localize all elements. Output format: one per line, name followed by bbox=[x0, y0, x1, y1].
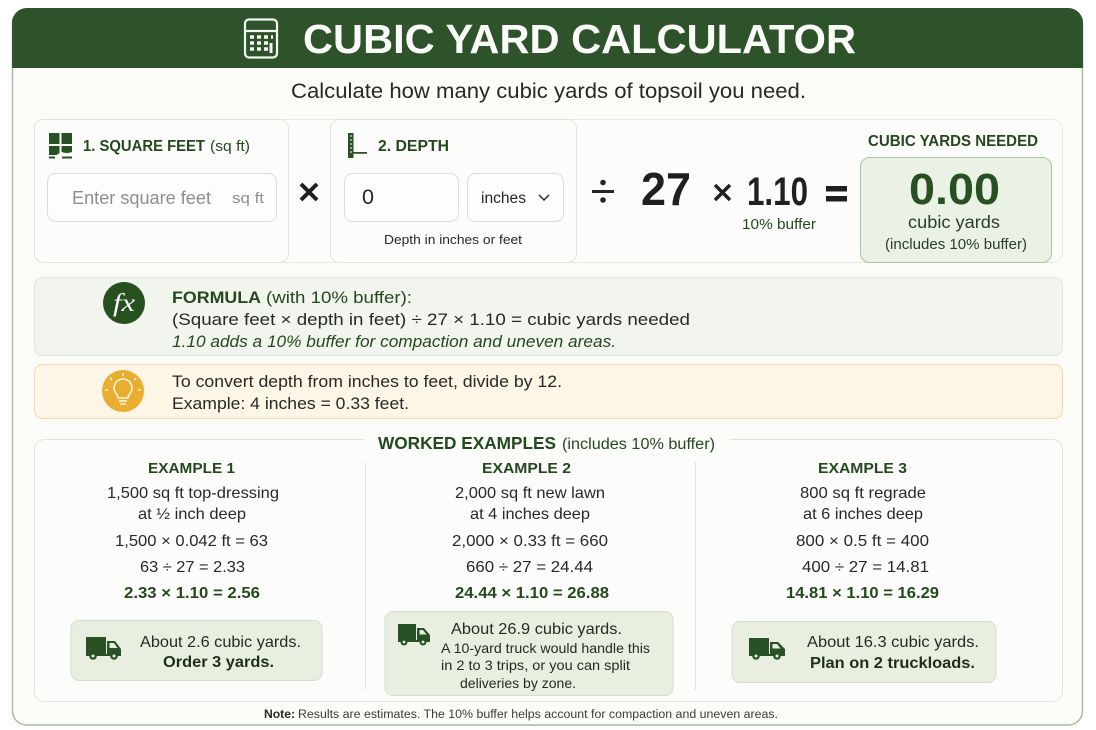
panel: result bbox=[860, 158, 1052, 262]
icon: truck bbox=[398, 624, 430, 646]
example 3: 800 × 0.5 ft = 400 bbox=[796, 533, 929, 550]
callout 1: Order 3 yards. bbox=[163, 654, 274, 671]
heading: 2. DEPTH bbox=[378, 138, 449, 155]
callout 2: in 2 to 3 trips, or you can split bbox=[441, 657, 630, 673]
operator: multiply bbox=[301, 184, 317, 200]
example 3: at 6 inches deep bbox=[803, 506, 923, 523]
tip text: To convert depth from inches to feet, divide by 12. bbox=[172, 372, 562, 391]
input field: Enter square feet bbox=[72, 188, 211, 208]
example 3: 800 sq ft regrade bbox=[800, 485, 926, 502]
callout 2: About 26.9 cubic yards. bbox=[451, 621, 622, 638]
depth value field bbox=[344, 174, 458, 222]
formula text: 1.10 adds a 10% buffer for compaction and uneven areas. bbox=[172, 332, 616, 351]
equation constants: 1.10 bbox=[747, 170, 808, 214]
icon: ruler bbox=[348, 133, 367, 158]
icon: calculator bbox=[245, 20, 277, 58]
callout 1: About 2.6 cubic yards. bbox=[140, 634, 301, 651]
panel: square feet input: (sq ft) bbox=[210, 138, 250, 155]
panel: square feet input bbox=[34, 120, 288, 262]
equation constants bbox=[592, 163, 847, 233]
unit select: inches bbox=[481, 190, 526, 207]
input field: sq ft bbox=[232, 190, 265, 207]
example 2: EXAMPLE 2 bbox=[482, 460, 571, 477]
icon: fx bbox=[103, 282, 145, 324]
footnote: Results are estimates. The 10% buffer helps account for compaction and uneven areas. bbox=[298, 709, 778, 721]
callout 2: A 10-yard truck would handle this bbox=[441, 640, 650, 656]
equation constants: 27 bbox=[641, 163, 691, 215]
icon: fx: fx bbox=[113, 290, 135, 317]
icon: square tiles bbox=[49, 133, 72, 158]
formula text: FORMULA bbox=[172, 288, 261, 307]
depth hint: Depth in inches or feet bbox=[384, 233, 523, 247]
tip text bbox=[172, 372, 562, 413]
depth value field: 0 bbox=[362, 186, 374, 209]
example 2: 2,000 sq ft new lawn bbox=[455, 485, 605, 502]
panel: result: 0.00 bbox=[909, 165, 1000, 214]
footnote: Note: bbox=[264, 709, 295, 721]
icon: truck bbox=[86, 637, 121, 660]
callout 3 bbox=[732, 622, 996, 682]
result label: CUBIC YARDS NEEDED bbox=[868, 133, 1038, 150]
calculator panel bbox=[34, 120, 1062, 262]
panel: result: (includes 10% buffer) bbox=[885, 237, 1027, 253]
formula text: (with 10% buffer): bbox=[266, 288, 412, 307]
example 1: 1,500 sq ft top-dressing bbox=[107, 485, 279, 502]
example 3: 14.81 × 1.10 = 16.29 bbox=[786, 585, 939, 602]
example 1: 63 ÷ 27 = 2.33 bbox=[140, 559, 245, 576]
example 1: EXAMPLE 1 bbox=[148, 460, 235, 477]
callout 2: deliveries by zone. bbox=[460, 675, 576, 691]
example 2: at 4 inches deep bbox=[470, 506, 590, 523]
input field bbox=[48, 174, 276, 222]
example 3 bbox=[732, 460, 996, 682]
title: CUBIC YARD CALCULATOR bbox=[303, 16, 856, 62]
formula text: (Square feet × depth in feet) ÷ 27 × 1.10 = cubic yards needed bbox=[172, 310, 690, 329]
example 1: at ½ inch deep bbox=[138, 506, 246, 523]
equation constants: 10% buffer bbox=[742, 217, 816, 233]
example 2: 660 ÷ 27 = 24.44 bbox=[466, 559, 593, 576]
panel: formula bbox=[34, 278, 1062, 356]
unit select bbox=[468, 174, 564, 222]
operator: divide bbox=[592, 180, 614, 203]
callout 2 bbox=[385, 612, 673, 696]
heading: WORKED EXAMPLES bbox=[378, 433, 556, 453]
callout 3: Plan on 2 truckloads. bbox=[810, 655, 975, 672]
example 2 bbox=[385, 460, 673, 696]
heading bbox=[378, 433, 715, 453]
example 3: 400 ÷ 27 = 14.81 bbox=[802, 559, 929, 576]
formula text bbox=[172, 288, 690, 351]
panel: worked examples bbox=[34, 433, 1062, 702]
example 1: 2.33 × 1.10 = 2.56 bbox=[124, 585, 260, 602]
heading: (includes 10% buffer) bbox=[562, 436, 715, 453]
icon: truck bbox=[749, 638, 785, 660]
example 3: EXAMPLE 3 bbox=[818, 460, 907, 477]
example 1: 1,500 × 0.042 ft = 63 bbox=[115, 533, 268, 550]
panel: result: cubic yards bbox=[908, 212, 1000, 232]
example 2: 24.44 × 1.10 = 26.88 bbox=[455, 585, 609, 602]
panel: depth input bbox=[330, 120, 576, 262]
subtitle: Calculate how many cubic yards of topsoil you need. bbox=[291, 80, 806, 103]
tip text: Example: 4 inches = 0.33 feet. bbox=[172, 394, 409, 413]
example 1 bbox=[71, 460, 322, 680]
header banner bbox=[12, 8, 1083, 68]
panel: tip bbox=[34, 364, 1062, 418]
example 2: 2,000 × 0.33 ft = 660 bbox=[452, 533, 608, 550]
callout 3: About 16.3 cubic yards. bbox=[807, 634, 979, 651]
callout 1 bbox=[71, 620, 322, 680]
heading: 1. SQUARE FEET bbox=[83, 138, 206, 155]
icon: light bulb bbox=[102, 370, 144, 412]
